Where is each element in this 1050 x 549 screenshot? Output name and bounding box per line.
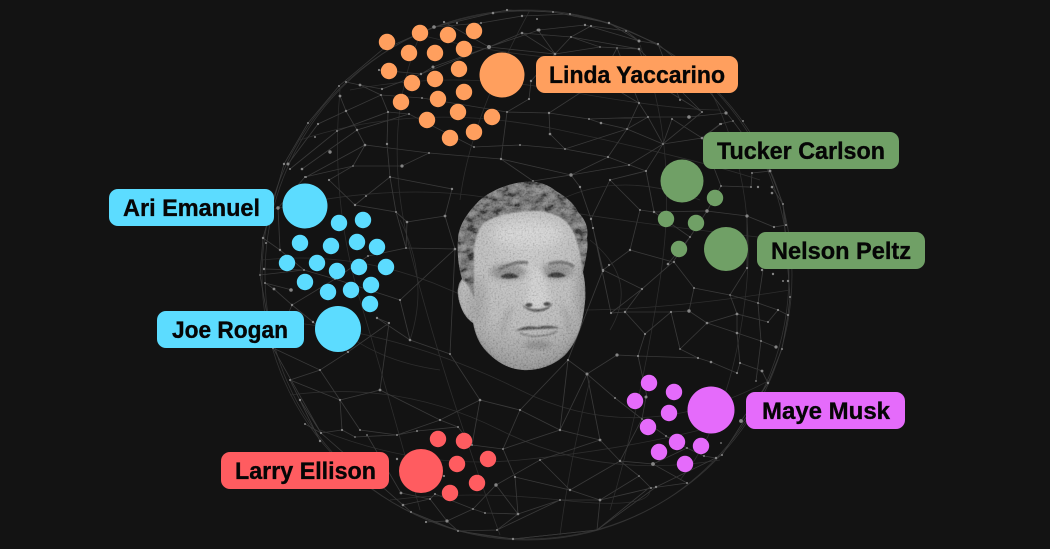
photo grain [458, 182, 588, 370]
cheek folds [503, 306, 568, 332]
mouth [515, 326, 560, 331]
label: Linda Yaccarino [536, 56, 738, 93]
label: Linda Yaccarino: Linda Yaccarino [549, 62, 725, 89]
blue small dots [279, 212, 394, 312]
cluster: Maye Musk (magenta) [627, 375, 905, 472]
label: Nelson Peltz: Nelson Peltz [771, 238, 911, 265]
infographic canvas [109, 8, 925, 540]
cluster: Ari Emanuel and Joe Rogan (blue) [109, 184, 394, 352]
magenta main node [688, 386, 734, 434]
jaw shading [479, 336, 576, 364]
long mesh arcs [262, 10, 790, 535]
label: Joe Rogan: Joe Rogan [172, 317, 288, 344]
eyebrows [499, 262, 528, 270]
label: Joe Rogan [157, 311, 304, 348]
label: Ari Emanuel [109, 189, 274, 226]
central portrait: face [458, 182, 588, 370]
label: Tucker Carlson: Tucker Carlson [717, 138, 885, 165]
red small dots [430, 431, 496, 501]
label: Tucker Carlson [703, 132, 899, 169]
forehead highlight [492, 220, 564, 248]
side shading [574, 258, 585, 320]
cluster: Linda Yaccarino (orange) [379, 23, 738, 146]
hair texture [458, 182, 588, 300]
cluster: Tucker Carlson and Nelson Peltz (green) [658, 132, 925, 271]
sphere wire rim [262, 10, 792, 540]
green node: Nelson Peltz [704, 227, 748, 271]
magenta small dots [627, 375, 709, 472]
label: Larry Ellison: Larry Ellison [235, 458, 376, 485]
skin [458, 211, 585, 371]
mesh edges [260, 14, 788, 539]
label: Maye Musk: Maye Musk [762, 398, 890, 425]
orange main node [480, 52, 524, 98]
network sphere mesh [259, 9, 792, 540]
label: Larry Ellison [221, 452, 389, 489]
nose [526, 268, 551, 309]
hair and head silhouette [458, 182, 588, 370]
label: Maye Musk [746, 392, 905, 429]
orange small dots [379, 23, 500, 146]
eye sockets [490, 264, 526, 280]
label: Ari Emanuel: Ari Emanuel [123, 195, 260, 222]
green node: Tucker Carlson [660, 160, 704, 202]
blue node: Joe Rogan [315, 306, 361, 352]
label: Nelson Peltz [757, 232, 925, 269]
red main node [399, 449, 443, 493]
mesh rim edges [260, 10, 790, 539]
mesh nodes [259, 9, 791, 540]
cluster: Larry Ellison (red) [221, 431, 496, 501]
green small dots [658, 190, 723, 257]
eyes [500, 273, 519, 278]
blue node: Ari Emanuel [282, 184, 328, 228]
